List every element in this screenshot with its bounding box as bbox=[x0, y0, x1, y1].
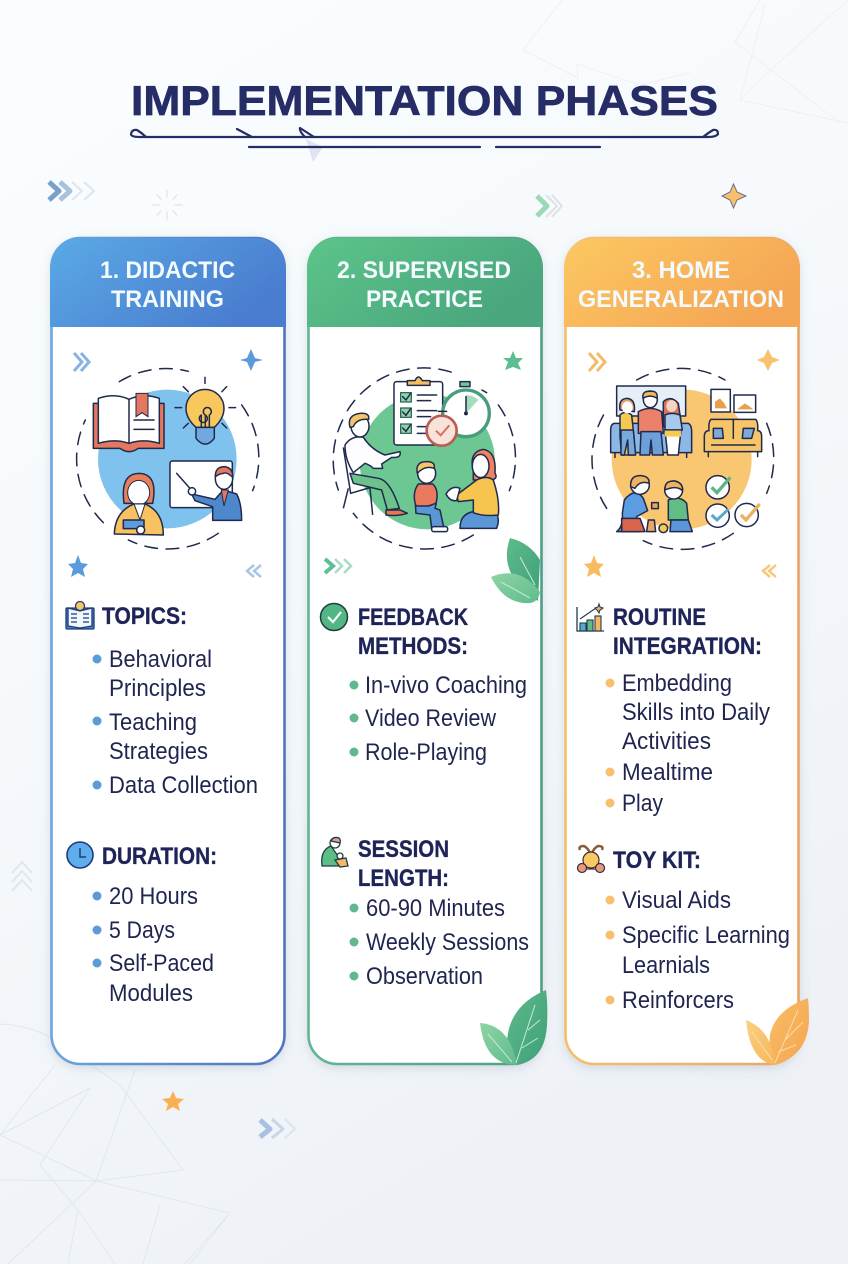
section: toy kit: Specific Learning bbox=[622, 922, 790, 949]
title: IMPLEMENTATION PHASES bbox=[131, 77, 718, 124]
section: duration: 5 Days bbox=[109, 917, 175, 944]
section: toy kit: Learnials bbox=[622, 952, 710, 979]
section: session length: LENGTH: bbox=[358, 865, 449, 892]
section: topics: Strategies bbox=[109, 738, 208, 765]
icon: bottom leaves bbox=[746, 998, 809, 1065]
icon: open book bbox=[66, 602, 94, 629]
card body bbox=[566, 238, 798, 1064]
section: feedback methods: FEEDBACK bbox=[358, 604, 469, 631]
icon: bottom leaves bbox=[480, 990, 547, 1065]
section: routine integration bbox=[577, 604, 770, 817]
background geometric lines bottom left bbox=[0, 1024, 230, 1264]
icon: chevrons top bbox=[589, 353, 605, 371]
icon: chevrons top bbox=[74, 353, 89, 371]
card header bbox=[564, 238, 800, 327]
section: duration: Self-Paced bbox=[109, 950, 214, 977]
section: toy kit bbox=[578, 846, 790, 1014]
section: topics: Teaching bbox=[109, 709, 197, 736]
section: routine integration: Mealtime bbox=[622, 759, 713, 786]
section: session length: Weekly Sessions bbox=[366, 929, 529, 956]
card header: PRACTICE bbox=[366, 286, 483, 313]
icon: chevrons bottom bbox=[247, 565, 261, 577]
section: toy kit: TOY KIT: bbox=[613, 847, 701, 874]
card header: 2. SUPERVISED bbox=[337, 257, 511, 284]
section: routine integration: Play bbox=[622, 790, 663, 817]
background geometric lines top right bbox=[523, 0, 848, 123]
icon: chevrons bottom bbox=[763, 565, 776, 577]
panel: didactic training bbox=[50, 238, 286, 1064]
section: topics: Behavioral bbox=[109, 646, 212, 673]
section: duration: 20 Hours bbox=[109, 883, 198, 910]
illustration: family home scene bbox=[592, 368, 774, 549]
decorative sunburst bbox=[152, 190, 182, 219]
icon: sparkle bbox=[757, 349, 780, 371]
illustration: learning scene bbox=[77, 369, 259, 549]
card header: 3. HOME bbox=[632, 257, 730, 284]
section: topics: Principles bbox=[109, 675, 206, 702]
card header: GENERALIZATION bbox=[578, 286, 784, 313]
section: topics: Data Collection bbox=[109, 772, 258, 799]
section: feedback methods: Role-Playing bbox=[365, 739, 487, 766]
title underline bbox=[131, 128, 718, 162]
icon: star bbox=[584, 555, 604, 577]
section: routine integration: Embedding bbox=[622, 670, 732, 697]
section: feedback methods bbox=[320, 604, 527, 766]
section: feedback methods: In-vivo Coaching bbox=[365, 672, 527, 699]
card header bbox=[50, 238, 286, 327]
icon: clock bbox=[67, 842, 93, 868]
decorative pale chevrons left bbox=[12, 862, 32, 891]
section: session length: 60-90 Minutes bbox=[366, 895, 505, 922]
decorative gold sparkle bbox=[722, 184, 746, 208]
icon: chevrons bbox=[325, 559, 333, 573]
card body bbox=[308, 238, 542, 1064]
panel: home generalization bbox=[564, 238, 809, 1065]
panel: supervised practice bbox=[307, 238, 547, 1065]
card header: TRAINING bbox=[111, 286, 224, 313]
card body bbox=[52, 238, 284, 1064]
card header: 1. DIDACTIC bbox=[100, 257, 235, 284]
icon: star bbox=[503, 351, 523, 370]
illustration: coaching scene bbox=[333, 368, 515, 549]
section: topics bbox=[66, 602, 258, 799]
icon: growth chart bbox=[577, 604, 604, 631]
section: routine integration: ROUTINE bbox=[613, 604, 706, 631]
icon: toy bbox=[578, 846, 604, 872]
icon: top leaves bbox=[491, 538, 540, 603]
section: session length: SESSION bbox=[358, 836, 449, 863]
section: duration: Modules bbox=[109, 980, 193, 1007]
icon: check badge bbox=[320, 604, 348, 630]
decorative green chevrons bbox=[537, 195, 562, 217]
section: feedback methods: Video Review bbox=[365, 705, 497, 732]
decorative star bottom bbox=[162, 1091, 184, 1111]
decorative chevrons top left bbox=[49, 182, 94, 200]
section: routine integration: Activities bbox=[622, 728, 711, 755]
section: routine integration: Skills into Daily bbox=[622, 699, 770, 726]
section: duration: DURATION: bbox=[102, 843, 217, 870]
card header bbox=[307, 238, 543, 327]
section: duration bbox=[67, 842, 217, 1007]
decorative blue chevrons bottom bbox=[260, 1119, 295, 1138]
icon: pale chevrons bbox=[335, 559, 351, 573]
section: session length bbox=[322, 836, 529, 990]
icon: sparkle bbox=[240, 349, 263, 371]
section: toy kit: Visual Aids bbox=[622, 887, 731, 914]
section: routine integration: INTEGRATION: bbox=[613, 633, 762, 660]
icon: caregiver bbox=[322, 837, 348, 867]
section: topics: TOPICS: bbox=[102, 603, 187, 630]
section: session length: Observation bbox=[366, 963, 483, 990]
section: feedback methods: METHODS: bbox=[358, 633, 468, 660]
icon: star bbox=[68, 555, 88, 577]
section: toy kit: Reinforcers bbox=[622, 987, 734, 1014]
